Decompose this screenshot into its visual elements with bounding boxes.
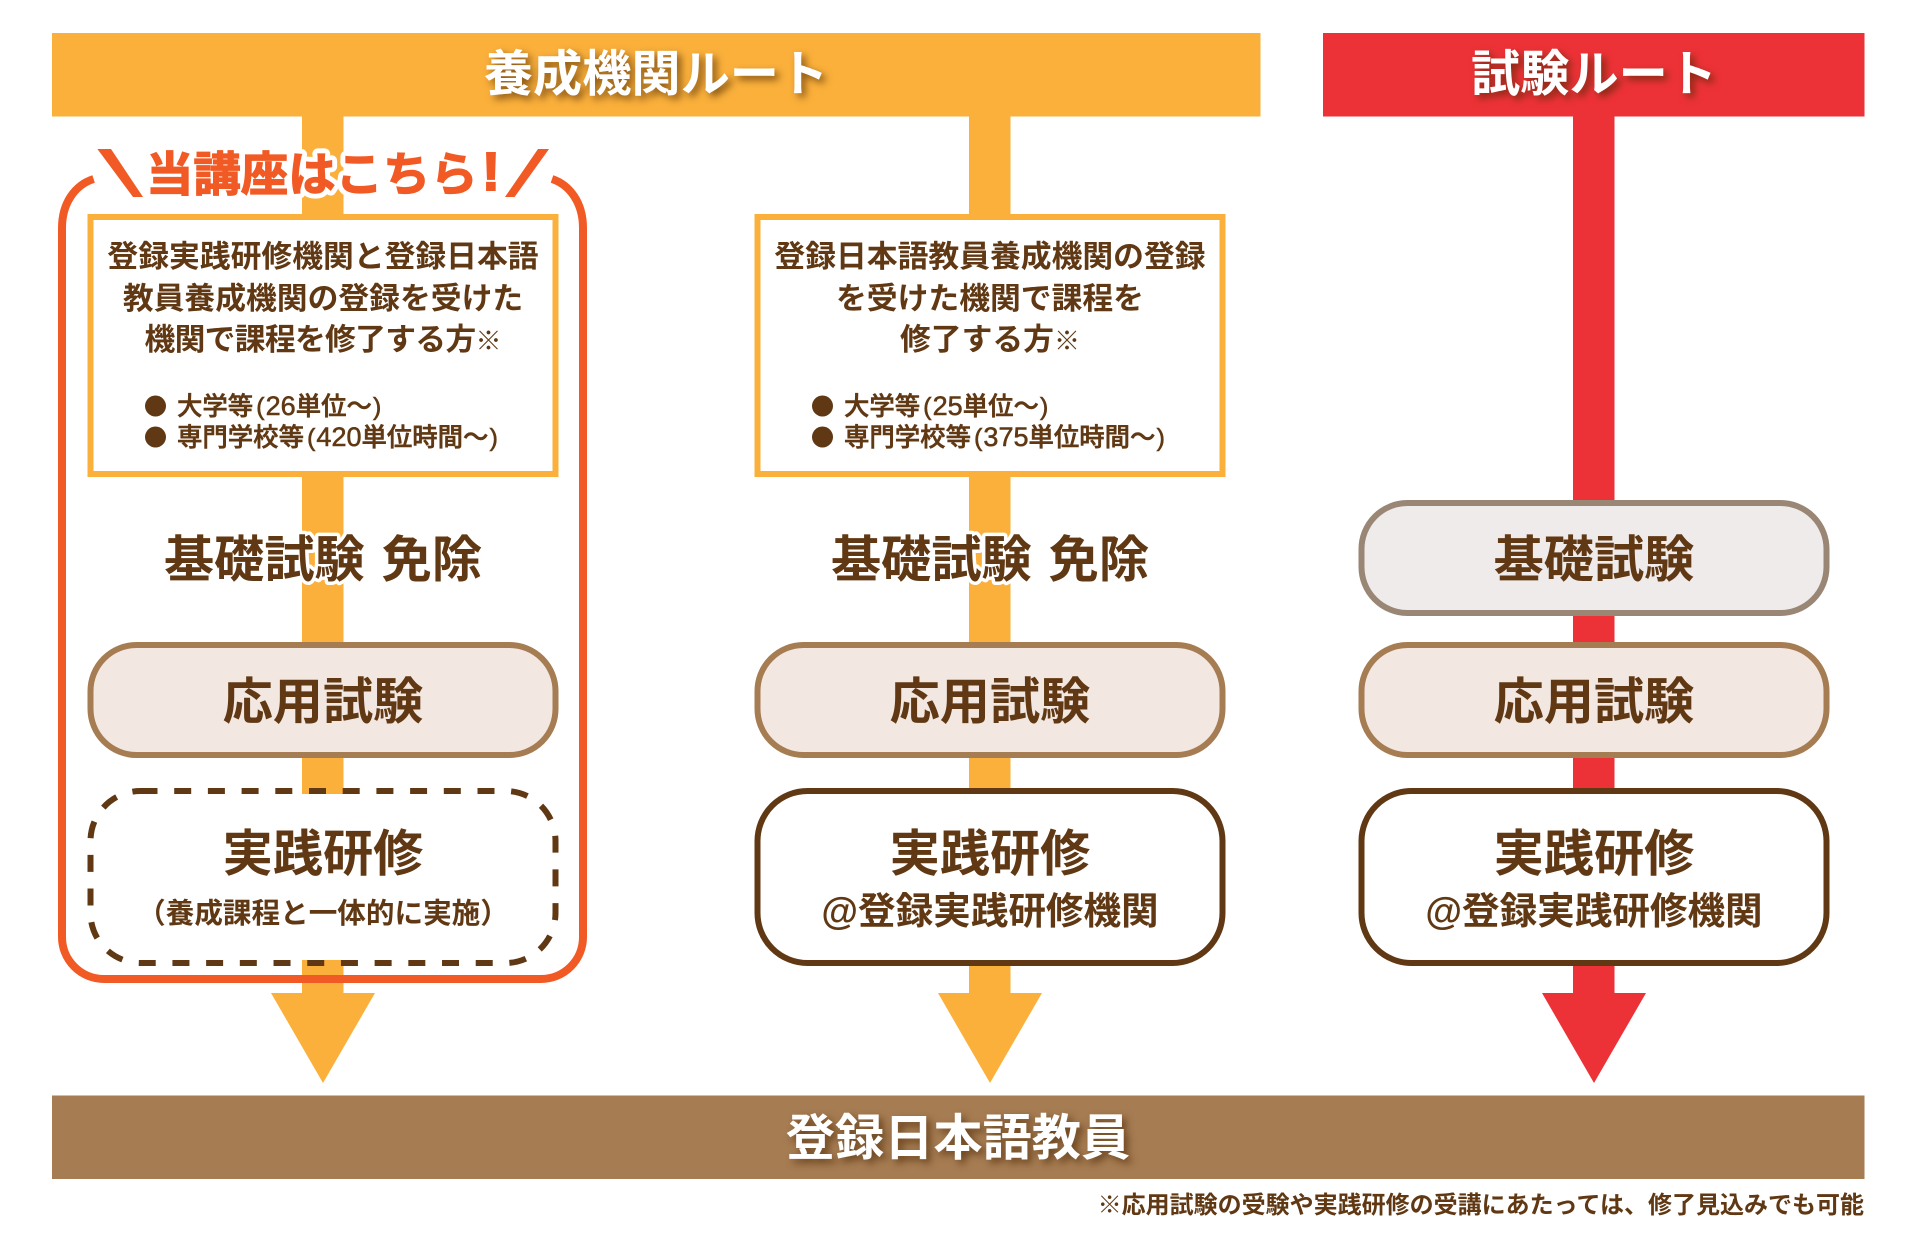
heading: registered Japanese teacher (52, 1096, 1864, 1179)
pill: applied exam: 応用試験 (223, 674, 423, 730)
panel: practical training: @登録実践研修機関 (1425, 890, 1763, 932)
panel: practical training: 実践研修 (890, 826, 1090, 882)
callout: this course: 当講座はこちら (146, 149, 478, 202)
pill: applied exam (758, 645, 1222, 755)
pill: applied exam: 応用試験 (890, 674, 1090, 730)
column: training institution route, this course (62, 110, 583, 1083)
label: basic exam exempt: 基礎試験 免除 (831, 532, 1149, 588)
heading: training institution route (52, 33, 1260, 116)
panel: eligibility box (90, 217, 556, 474)
panel: eligibility box: を受けた機関で課程を (836, 281, 1144, 316)
panel: eligibility box: 教員養成機関の登録を受けた (123, 281, 523, 316)
column: exam route (1362, 110, 1826, 1083)
panel: eligibility box: 大学等(26単位〜) (177, 391, 381, 421)
footnote: ※応用試験の受験や実践研修の受講にあたっては、修了見込みでも可能 (1098, 1192, 1864, 1219)
panel: eligibility box: 機関で課程を修了する方※ (144, 322, 502, 357)
panel: eligibility box: 修了する方※ (900, 322, 1080, 357)
pill: basic exam (1362, 503, 1826, 613)
pill: applied exam: 応用試験 (1494, 674, 1694, 730)
callout: this course (97, 142, 549, 202)
panel: eligibility box (758, 217, 1222, 474)
panel: practical training, dashed: 実践研修 (223, 826, 423, 882)
arrow: orange route arrow, middle column (938, 110, 1042, 1083)
pill: applied exam (90, 645, 556, 755)
panel: practical training: @登録実践研修機関 (821, 890, 1159, 932)
panel: practical training (1362, 791, 1826, 963)
panel: practical training: 実践研修 (1494, 826, 1694, 882)
heading: training institution route: 養成機関ルート (484, 47, 828, 102)
callout: this course: ! (482, 142, 500, 202)
panel: eligibility box: 専門学校等(420単位時間〜) (177, 422, 498, 452)
heading: exam route (1323, 33, 1864, 116)
panel: practical training, dashed (90, 791, 556, 963)
heading: registered Japanese teacher: 登録日本語教員 (786, 1111, 1130, 1166)
arrow: red route arrow (1542, 110, 1646, 1083)
panel: eligibility box: 専門学校等(375単位時間〜) (844, 422, 1165, 452)
panel: practical training (758, 791, 1222, 963)
callout: this course: 当講座はこちら (146, 149, 478, 202)
panel: eligibility box: 登録日本語教員養成機関の登録 (774, 239, 1206, 274)
column: training institution route, second path (758, 110, 1222, 1083)
heading: exam route: 試験ルート (1471, 47, 1717, 102)
panel: practical training, dashed: （養成課程と一体的に実施） (137, 898, 509, 930)
label: basic exam exempt: 基礎試験 免除 (164, 532, 482, 588)
panel: eligibility box: 登録実践研修機関と登録日本語 (107, 239, 539, 274)
panel frame: this course highlight (62, 179, 583, 979)
pill: basic exam: 基礎試験 (1494, 532, 1694, 588)
pill: applied exam (1362, 645, 1826, 755)
arrow: orange route arrow, left column (271, 110, 375, 1083)
panel: eligibility box: 大学等(25単位〜) (844, 391, 1048, 421)
